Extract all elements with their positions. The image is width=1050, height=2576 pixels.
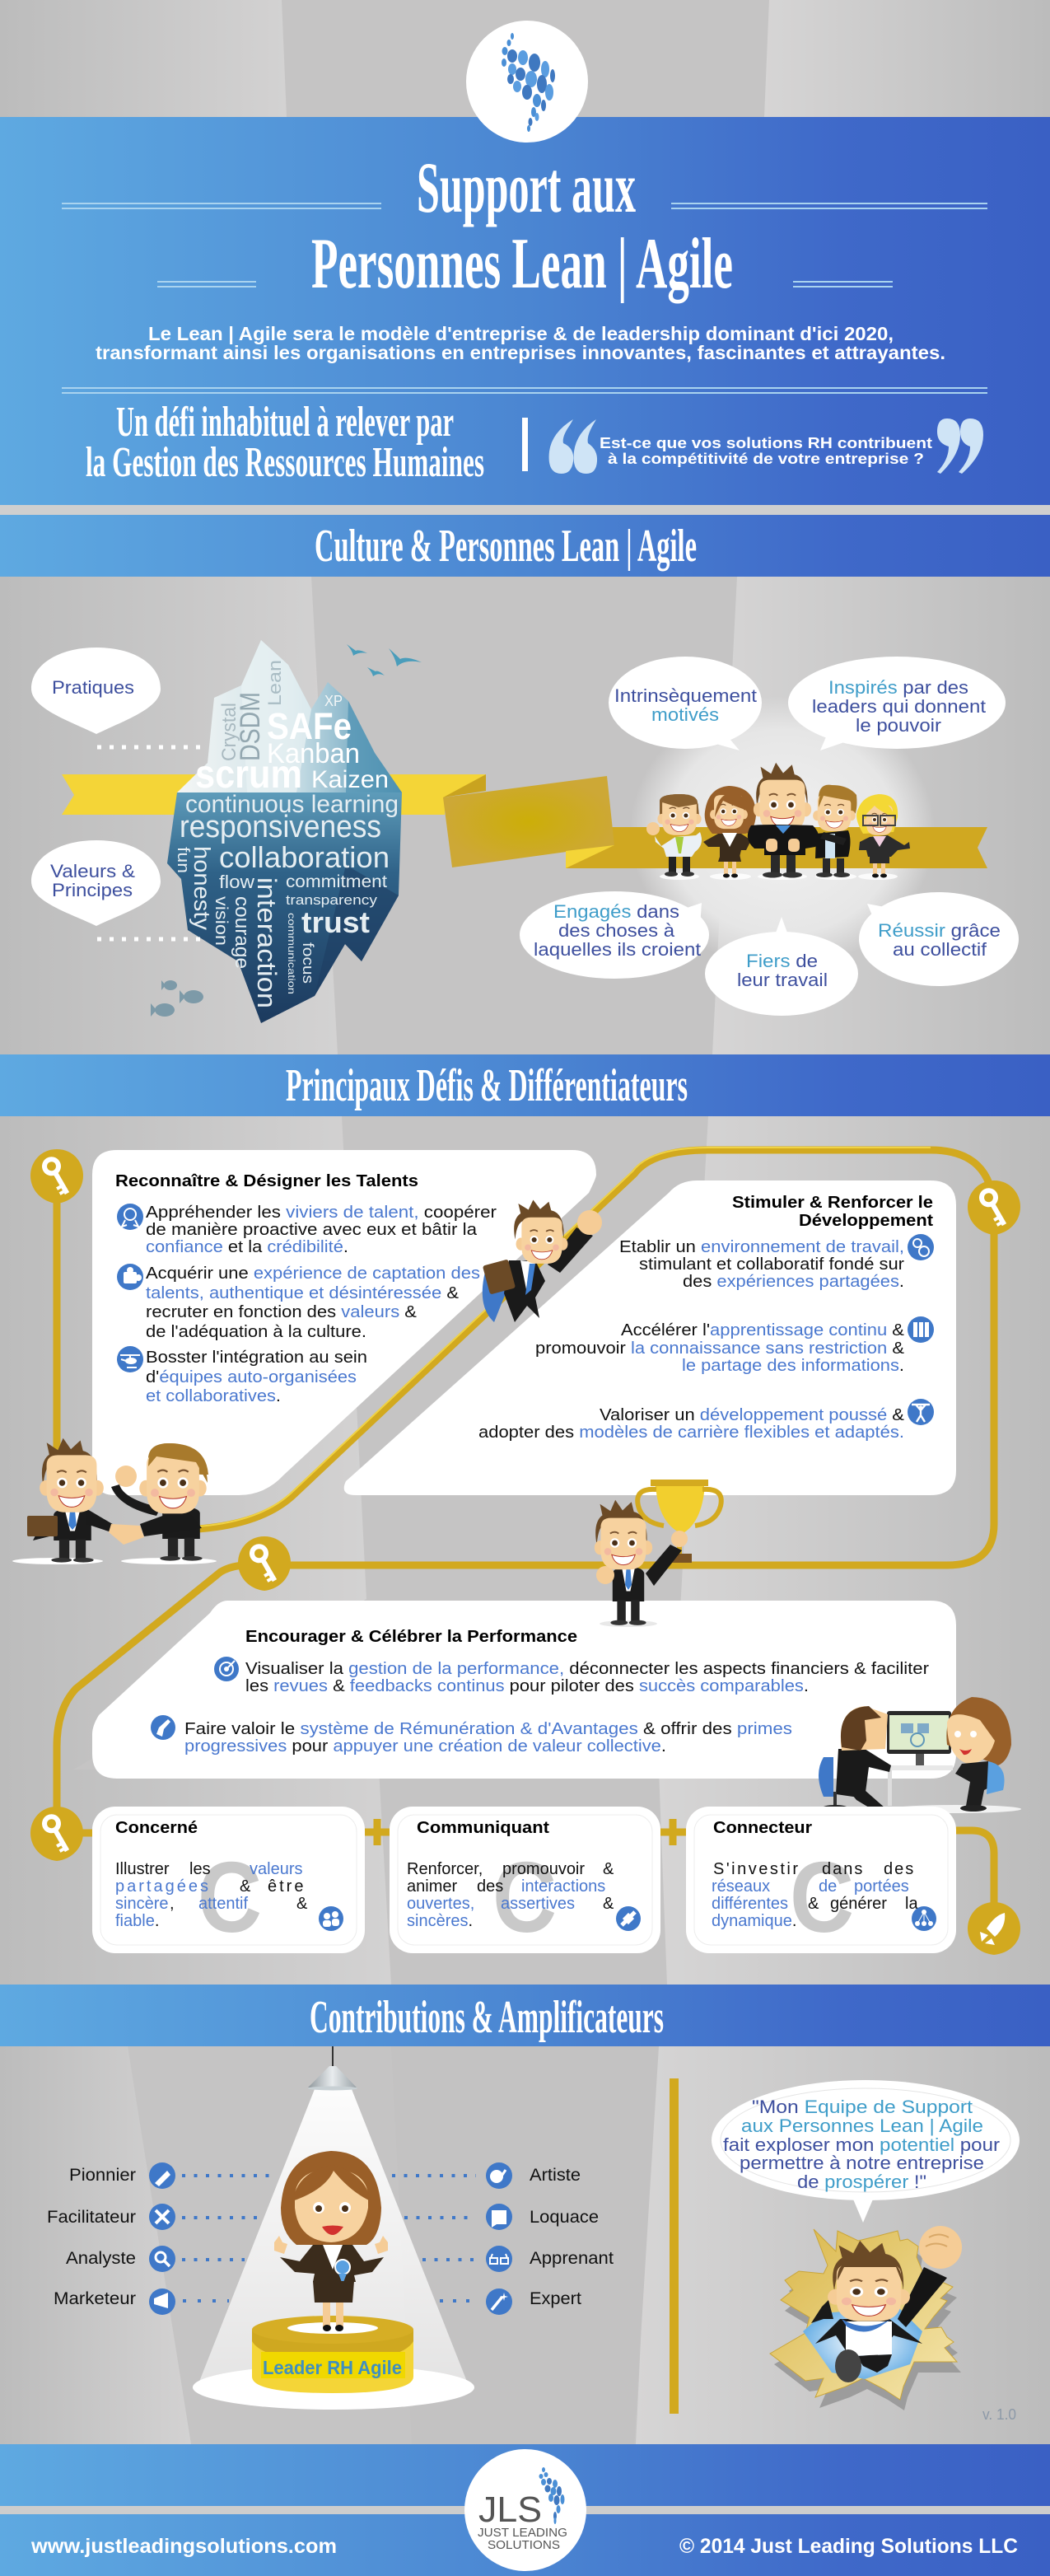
section band: Culture: Culture & Personnes Lean | Agile: [315, 521, 697, 572]
text: rémunération: progressives pour appuyer une création de valeur collective .: [184, 1737, 666, 1756]
logo dots: [502, 33, 555, 132]
quote question: [600, 435, 932, 467]
desk scene: [819, 1697, 1021, 1813]
icon: weightlifter: [908, 1399, 934, 1425]
quote speech bubble: "Mon Equipe de Support: [752, 2097, 973, 2117]
word cloud: DSDM: [235, 692, 266, 761]
hanging lamp: [308, 2046, 357, 2091]
word cloud: vision: [212, 896, 231, 946]
body: assertives: [501, 1895, 575, 1913]
body: &: [240, 1877, 251, 1896]
body: [115, 1860, 308, 1930]
word cloud: communication: [286, 913, 297, 994]
body: dynamique.: [712, 1912, 796, 1930]
bubble: Inspirés: leaders qui donnent: [812, 696, 986, 717]
subheading: défi: [86, 399, 484, 486]
body: Illustrer: [115, 1860, 170, 1878]
section band: Défis: [0, 1054, 1050, 1116]
subheading: défi: Un défi inhabituel à relever par: [116, 399, 454, 446]
body: promouvoir: [502, 1860, 585, 1878]
section band: Contributions: Contributions & Amplificateurs: [310, 1992, 664, 2043]
body: portées: [854, 1877, 909, 1896]
section band: Défis: Principaux Défis & Différentiateurs: [286, 1060, 688, 1111]
label: Leader RH Agile: [263, 2357, 402, 2378]
body: ouvertes,: [407, 1895, 474, 1913]
letter C: C: [198, 1841, 262, 1953]
text: environnement: stimulant et collaboratif fondé sur: [639, 1255, 904, 1274]
key pin: bottom left: [30, 1807, 83, 1861]
heading: Reconnaître & Désigner les Talents: [115, 1172, 418, 1190]
body: des: [477, 1877, 503, 1896]
body: la: [905, 1895, 918, 1913]
footer logo: JUST LEADING: [478, 2526, 567, 2540]
word cloud: continuous learning: [185, 791, 399, 818]
vertical gold bar: [670, 2078, 679, 2414]
body: &: [296, 1895, 308, 1913]
word cloud: Lean: [264, 660, 285, 706]
rocket pin: [968, 1902, 1020, 1955]
quote speech bubble: [712, 2080, 1020, 2223]
trophy: [637, 1480, 721, 1563]
ribbon fold and centre panel: [443, 774, 987, 868]
bubble: Engagés: laquelles ils croient: [534, 939, 701, 960]
text: développement: [478, 1406, 905, 1442]
man with trophy: [595, 1480, 721, 1627]
closing quote mark: [937, 418, 983, 474]
icon: medal: [117, 1204, 143, 1230]
man with briefcase: [27, 1438, 115, 1563]
text: performance: Visualiser la gestion de la performance, déconnecter les aspects financiers & faciliter: [245, 1660, 929, 1678]
man at desk: [819, 1706, 891, 1812]
key pin: middle: [238, 1536, 291, 1591]
text: développement: Valoriser un développement poussé &: [600, 1406, 905, 1424]
icon: gears: [908, 1234, 934, 1260]
intro paragraph: Le Lean | Agile sera le modèle d'entreprise & de leadership dominant d'ici 2020,: [148, 323, 894, 344]
card: Concerné: [92, 1807, 365, 1953]
text: viviers: de manière proactive avec eux et bâtir la: [146, 1221, 478, 1239]
word cloud: SAFe: [267, 705, 352, 747]
logo circle: [466, 21, 588, 143]
superhero bursting through wall: [770, 2226, 962, 2410]
bubble: Inspirés: le pouvoir: [856, 715, 941, 736]
role: Loquace: Loquace: [530, 2208, 599, 2227]
title rules: [62, 203, 987, 393]
body: être: [268, 1877, 306, 1896]
opening quote mark: [549, 419, 597, 474]
bubble: Réussir: [859, 892, 1019, 986]
bubble: Engagés: Engagés dans: [553, 901, 679, 922]
text: apprentissage: le partage des informations .: [682, 1357, 904, 1375]
intro paragraph: transformant ainsi les organisations en entreprises innovantes, fascinantes et attrayantes.: [96, 342, 945, 363]
body: &: [603, 1860, 614, 1878]
subheading: défi: la Gestion des Ressources Humaines: [86, 439, 484, 486]
word cloud: commitment: [286, 872, 387, 891]
text: environnement: Etablir un environnement de travail,: [619, 1238, 904, 1256]
person: central man thumbs up: [748, 763, 819, 878]
spotlight beam: [198, 2089, 469, 2386]
text: viviers: Appréhender les viviers de talent, coopérer: [146, 1204, 497, 1222]
icon: target: [214, 1657, 239, 1681]
card: Encourager: [92, 1601, 956, 1779]
body: de: [819, 1877, 837, 1896]
text: captation: Acquérir une expérience de captation des: [146, 1265, 480, 1283]
word cloud: focus: [300, 942, 316, 984]
icon: satellite: [616, 1906, 641, 1931]
role: Marketeur: Marketeur: [54, 2289, 136, 2308]
word cloud: transparency: [286, 892, 378, 908]
body: S'investir: [713, 1860, 800, 1878]
body: &: [808, 1895, 819, 1913]
role: Facilitateur: [47, 2204, 262, 2230]
bubble: Intrinsèquement motivés: [609, 657, 762, 750]
heading: [732, 1194, 933, 1230]
text: performance: les revues & feedbacks continus pour piloter des succès comparables .: [245, 1677, 809, 1695]
man with ok hand: [109, 1443, 208, 1561]
gold journey path: [57, 1148, 994, 1907]
footer logo dots: [539, 2467, 565, 2524]
leader woman: [274, 2151, 388, 2331]
role: Facilitateur: Facilitateur: [47, 2208, 136, 2227]
woman at desk: [946, 1697, 1011, 1812]
person: man crossed arms: [813, 785, 856, 877]
dotted line: Pratiques: [97, 745, 201, 750]
body: valeurs: [250, 1860, 302, 1878]
cape and body: [811, 2267, 947, 2382]
body: [407, 1860, 614, 1930]
body: [712, 1860, 918, 1930]
role: Pionnier: [69, 2162, 276, 2189]
quote speech bubble: permettre à notre entreprise: [740, 2153, 984, 2173]
body: des: [884, 1860, 915, 1878]
pedestal: [252, 2316, 413, 2393]
bubble: Engagés: des choses à: [558, 920, 675, 941]
text: apprentissage: [535, 1321, 905, 1375]
text: performance: [245, 1660, 929, 1695]
body: générer: [830, 1895, 887, 1913]
section band: Contributions: [0, 1985, 1050, 2046]
heading: Stimuler & Renforcer le: [732, 1194, 933, 1212]
bubble: Inspirés: [788, 657, 1006, 750]
quote question: Est-ce que vos solutions RH contribuent: [600, 435, 932, 451]
header band: [0, 117, 1050, 505]
text: environnement: [619, 1238, 904, 1291]
body: Renforcer,: [407, 1860, 483, 1878]
word cloud: trust: [301, 905, 370, 939]
bubble: Pratiques: [31, 648, 161, 734]
card: Stimuler: [344, 1180, 956, 1495]
role: Artiste: [392, 2162, 581, 2189]
text: captation: talents, authentique et désintéressée &: [146, 1284, 460, 1302]
icon: helicopter: [117, 1346, 143, 1372]
website: www.justleadingsolutions.com: [30, 2535, 337, 2558]
plus connector: [660, 1819, 686, 1845]
quote speech bubble: fait exploser mon potentiel pour: [723, 2134, 1000, 2155]
word cloud: [174, 660, 399, 1008]
copyright: © 2014 Just Leading Solutions LLC: [679, 2535, 1018, 2558]
text: viviers: [146, 1204, 497, 1256]
iceberg: [167, 640, 402, 1023]
text: environnement: des expériences partagées .: [683, 1273, 904, 1291]
text: intégration: Bosster l'intégration au sein: [146, 1349, 367, 1367]
heading: Encourager & Célébrer la Performance: [245, 1628, 577, 1646]
footer logo: SOLUTIONS: [488, 2538, 560, 2552]
text: captation: [146, 1265, 480, 1341]
birds: [347, 644, 422, 676]
body: partagées: [115, 1877, 211, 1896]
fish: [151, 980, 203, 1017]
card: Communiquant: [390, 1807, 660, 1953]
floor spotlight ellipse: [193, 2365, 474, 2410]
word cloud: honesty: [189, 846, 215, 930]
body: interactions: [521, 1877, 605, 1896]
word cloud: XP: [324, 693, 343, 709]
key pin: top right: [968, 1180, 1020, 1235]
quote speech bubble: aux Personnes Lean | Agile: [741, 2115, 983, 2136]
word cloud: responsiveness: [180, 810, 381, 844]
handshake men: [12, 1438, 217, 1564]
flying man with cape: [483, 1199, 602, 1322]
footer bands: [0, 2444, 1050, 2576]
text: rémunération: [184, 1720, 792, 1756]
bubble: Intrinsèquement motivés: Intrinsèquement: [614, 685, 757, 706]
text: intégration: d'équipes auto-organisées: [146, 1368, 357, 1386]
body: dans: [822, 1860, 864, 1878]
heading: Communiquant: [417, 1819, 549, 1837]
body: sincère: [115, 1895, 168, 1913]
body: animer: [407, 1877, 457, 1896]
word cloud: fun: [174, 847, 192, 873]
text: viviers: confiance et la crédibilité .: [146, 1238, 348, 1256]
plus connector: [365, 1819, 390, 1845]
body: ,: [170, 1895, 175, 1913]
bubble: Inspirés: Inspirés par des: [828, 677, 968, 698]
text: captation: de l'adéquation à la culture.: [146, 1323, 366, 1341]
text: rémunération: Faire valoir le système de Rémunération & d'Avantages & offrir des primes: [184, 1720, 792, 1738]
heading: Développement: [799, 1212, 933, 1230]
role: Analyste: [66, 2246, 245, 2272]
text: développement: adopter des modèles de carrière flexibles et adaptés.: [478, 1424, 904, 1442]
word cloud: flow: [219, 872, 254, 892]
title: Personnes Lean | Agile: Personnes Lean | Agile: [311, 224, 733, 304]
role: Pionnier: Pionnier: [69, 2166, 136, 2185]
bubble: Valeurs et Principes: [31, 840, 161, 926]
word cloud: Kaizen: [311, 766, 389, 793]
iceberg above water: [177, 640, 402, 792]
bubble: Réussir: Réussir grâce: [878, 920, 1001, 941]
text: apprentissage: Accélérer l' apprentissage continu &: [621, 1321, 905, 1339]
icon: network: [912, 1906, 936, 1931]
version label: v. 1.0: [982, 2406, 1016, 2423]
letter C: C: [790, 1841, 854, 1953]
divider bar: [522, 418, 528, 471]
role: Loquace: [404, 2204, 599, 2230]
bubble: Fiers: [705, 917, 858, 1016]
ribbon left: [62, 774, 486, 815]
word cloud: courage: [231, 896, 253, 969]
body: réseaux: [712, 1877, 770, 1896]
card: Reconnaître: [92, 1150, 596, 1495]
bubble: Engagés: [520, 891, 709, 979]
role: Expert: [440, 2288, 581, 2315]
body: &: [603, 1895, 614, 1913]
iceberg below water: [167, 792, 402, 1023]
body: sincères.: [407, 1912, 473, 1930]
bubble: Fiers: leur travail: [737, 970, 828, 990]
role: Marketeur: [54, 2288, 229, 2315]
role: Expert: Expert: [530, 2289, 581, 2308]
quote question: à la compétitivité de votre entreprise ?: [608, 451, 924, 467]
bubble: Valeurs et Principes: Valeurs &: [50, 861, 135, 881]
bubble: Pratiques: Pratiques: [52, 677, 134, 698]
person: blonde woman with glasses: [856, 794, 910, 878]
text: intégration: et collaboratives .: [146, 1387, 281, 1405]
role: Artiste: Artiste: [530, 2166, 581, 2185]
bubble: Intrinsèquement motivés: motivés: [651, 704, 719, 725]
person: woman brown hair: [703, 786, 756, 878]
body: fiable.: [115, 1912, 159, 1930]
letter C: C: [492, 1841, 557, 1953]
team of five characters: [646, 763, 910, 880]
bubble: Valeurs et Principes: Principes: [52, 880, 133, 900]
word cloud: interaction: [252, 877, 282, 1008]
heading: Concerné: [115, 1819, 198, 1837]
dotted line: Valeurs: [97, 937, 201, 941]
monitor: [885, 1711, 953, 1806]
icon: people: [319, 1906, 343, 1931]
role: Apprenant: Apprenant: [530, 2249, 614, 2268]
section band: Culture: [0, 515, 1050, 577]
heading: Connecteur: [713, 1819, 812, 1837]
role: Analyste: Analyste: [66, 2249, 136, 2268]
body: les: [189, 1860, 211, 1878]
word cloud: Kanban: [267, 738, 360, 769]
text: captation: recruter en fonction des valeurs &: [146, 1303, 418, 1321]
body: différentes: [712, 1895, 788, 1913]
word cloud: scrum: [195, 753, 302, 797]
body: attentif: [198, 1895, 248, 1913]
word cloud: Crystal: [218, 703, 240, 761]
icon: bottle: [151, 1715, 175, 1740]
footer logo: JLS: [478, 2490, 542, 2530]
text: intégration: [146, 1349, 367, 1405]
key pin: top left: [30, 1149, 83, 1204]
quote speech bubble: de prospérer !": [797, 2172, 926, 2192]
card: Connecteur: [686, 1807, 956, 1953]
bubble: Fiers: Fiers de: [746, 951, 818, 971]
bubble: Réussir: au collectif: [893, 939, 987, 960]
icon: books: [908, 1316, 934, 1343]
title: Support aux: Support aux: [417, 148, 636, 228]
intro paragraph: [96, 323, 945, 363]
footer logo: [464, 2449, 586, 2571]
role: Apprenant: [422, 2246, 614, 2272]
word cloud: collaboration: [219, 840, 390, 874]
icon: puzzle: [117, 1264, 143, 1290]
text: apprentissage: promouvoir la connaissance sans restriction &: [535, 1339, 905, 1358]
person: white shirt: [646, 794, 702, 877]
people glow: [630, 696, 935, 968]
